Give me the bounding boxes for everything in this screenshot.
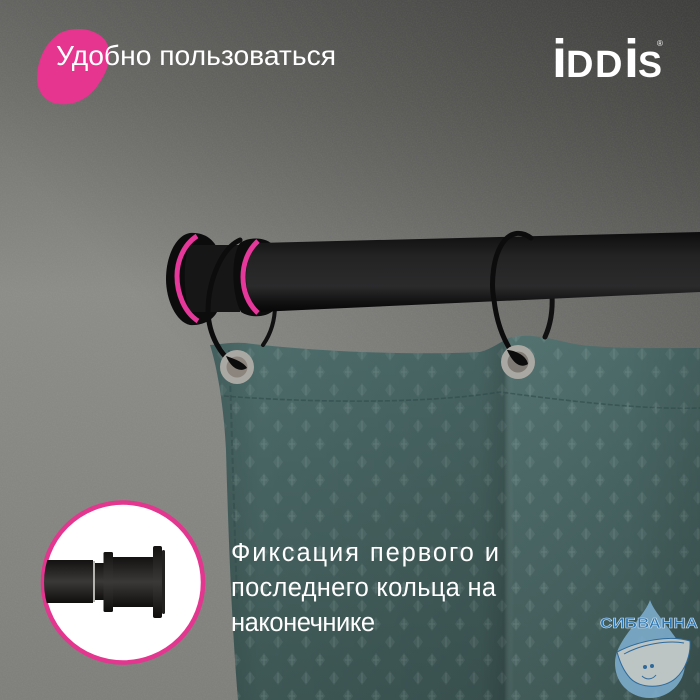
watermark: sibvanna: СИБВАННА (600, 615, 698, 632)
first pink band (177, 236, 198, 321)
caption (231, 539, 499, 637)
cap disk (166, 233, 218, 325)
watermark: sibvanna (600, 600, 698, 698)
curtain (210, 336, 700, 700)
second ring (493, 233, 531, 360)
far side of curtain rings (263, 295, 552, 345)
logo: iddis (552, 29, 663, 89)
rod (246, 232, 700, 312)
caption: последнего кольца на (231, 574, 497, 602)
end cap (95, 546, 165, 618)
caption: наконечнике (231, 609, 375, 637)
accent blob (37, 29, 109, 104)
logo: iddis: D (595, 44, 622, 86)
caption: Фиксация первого и (231, 539, 499, 567)
registered mark: ® (657, 39, 663, 48)
collar (233, 238, 274, 316)
logo: iddis: i (624, 29, 639, 89)
rod tube (40, 560, 95, 603)
logo: iddis: D (566, 44, 593, 86)
second pink band (243, 241, 258, 313)
eyelet: first ring (220, 350, 254, 384)
first ring around the cap (208, 240, 240, 366)
logo: iddis: i (552, 29, 567, 89)
heading: Удобно пользоваться (56, 40, 336, 71)
cap neck (185, 245, 240, 312)
eyelet: second ring (501, 345, 535, 379)
inset: rod end detail (40, 502, 203, 662)
logo: iddis: S (638, 44, 662, 85)
rod end cap with pink rings (166, 232, 700, 325)
